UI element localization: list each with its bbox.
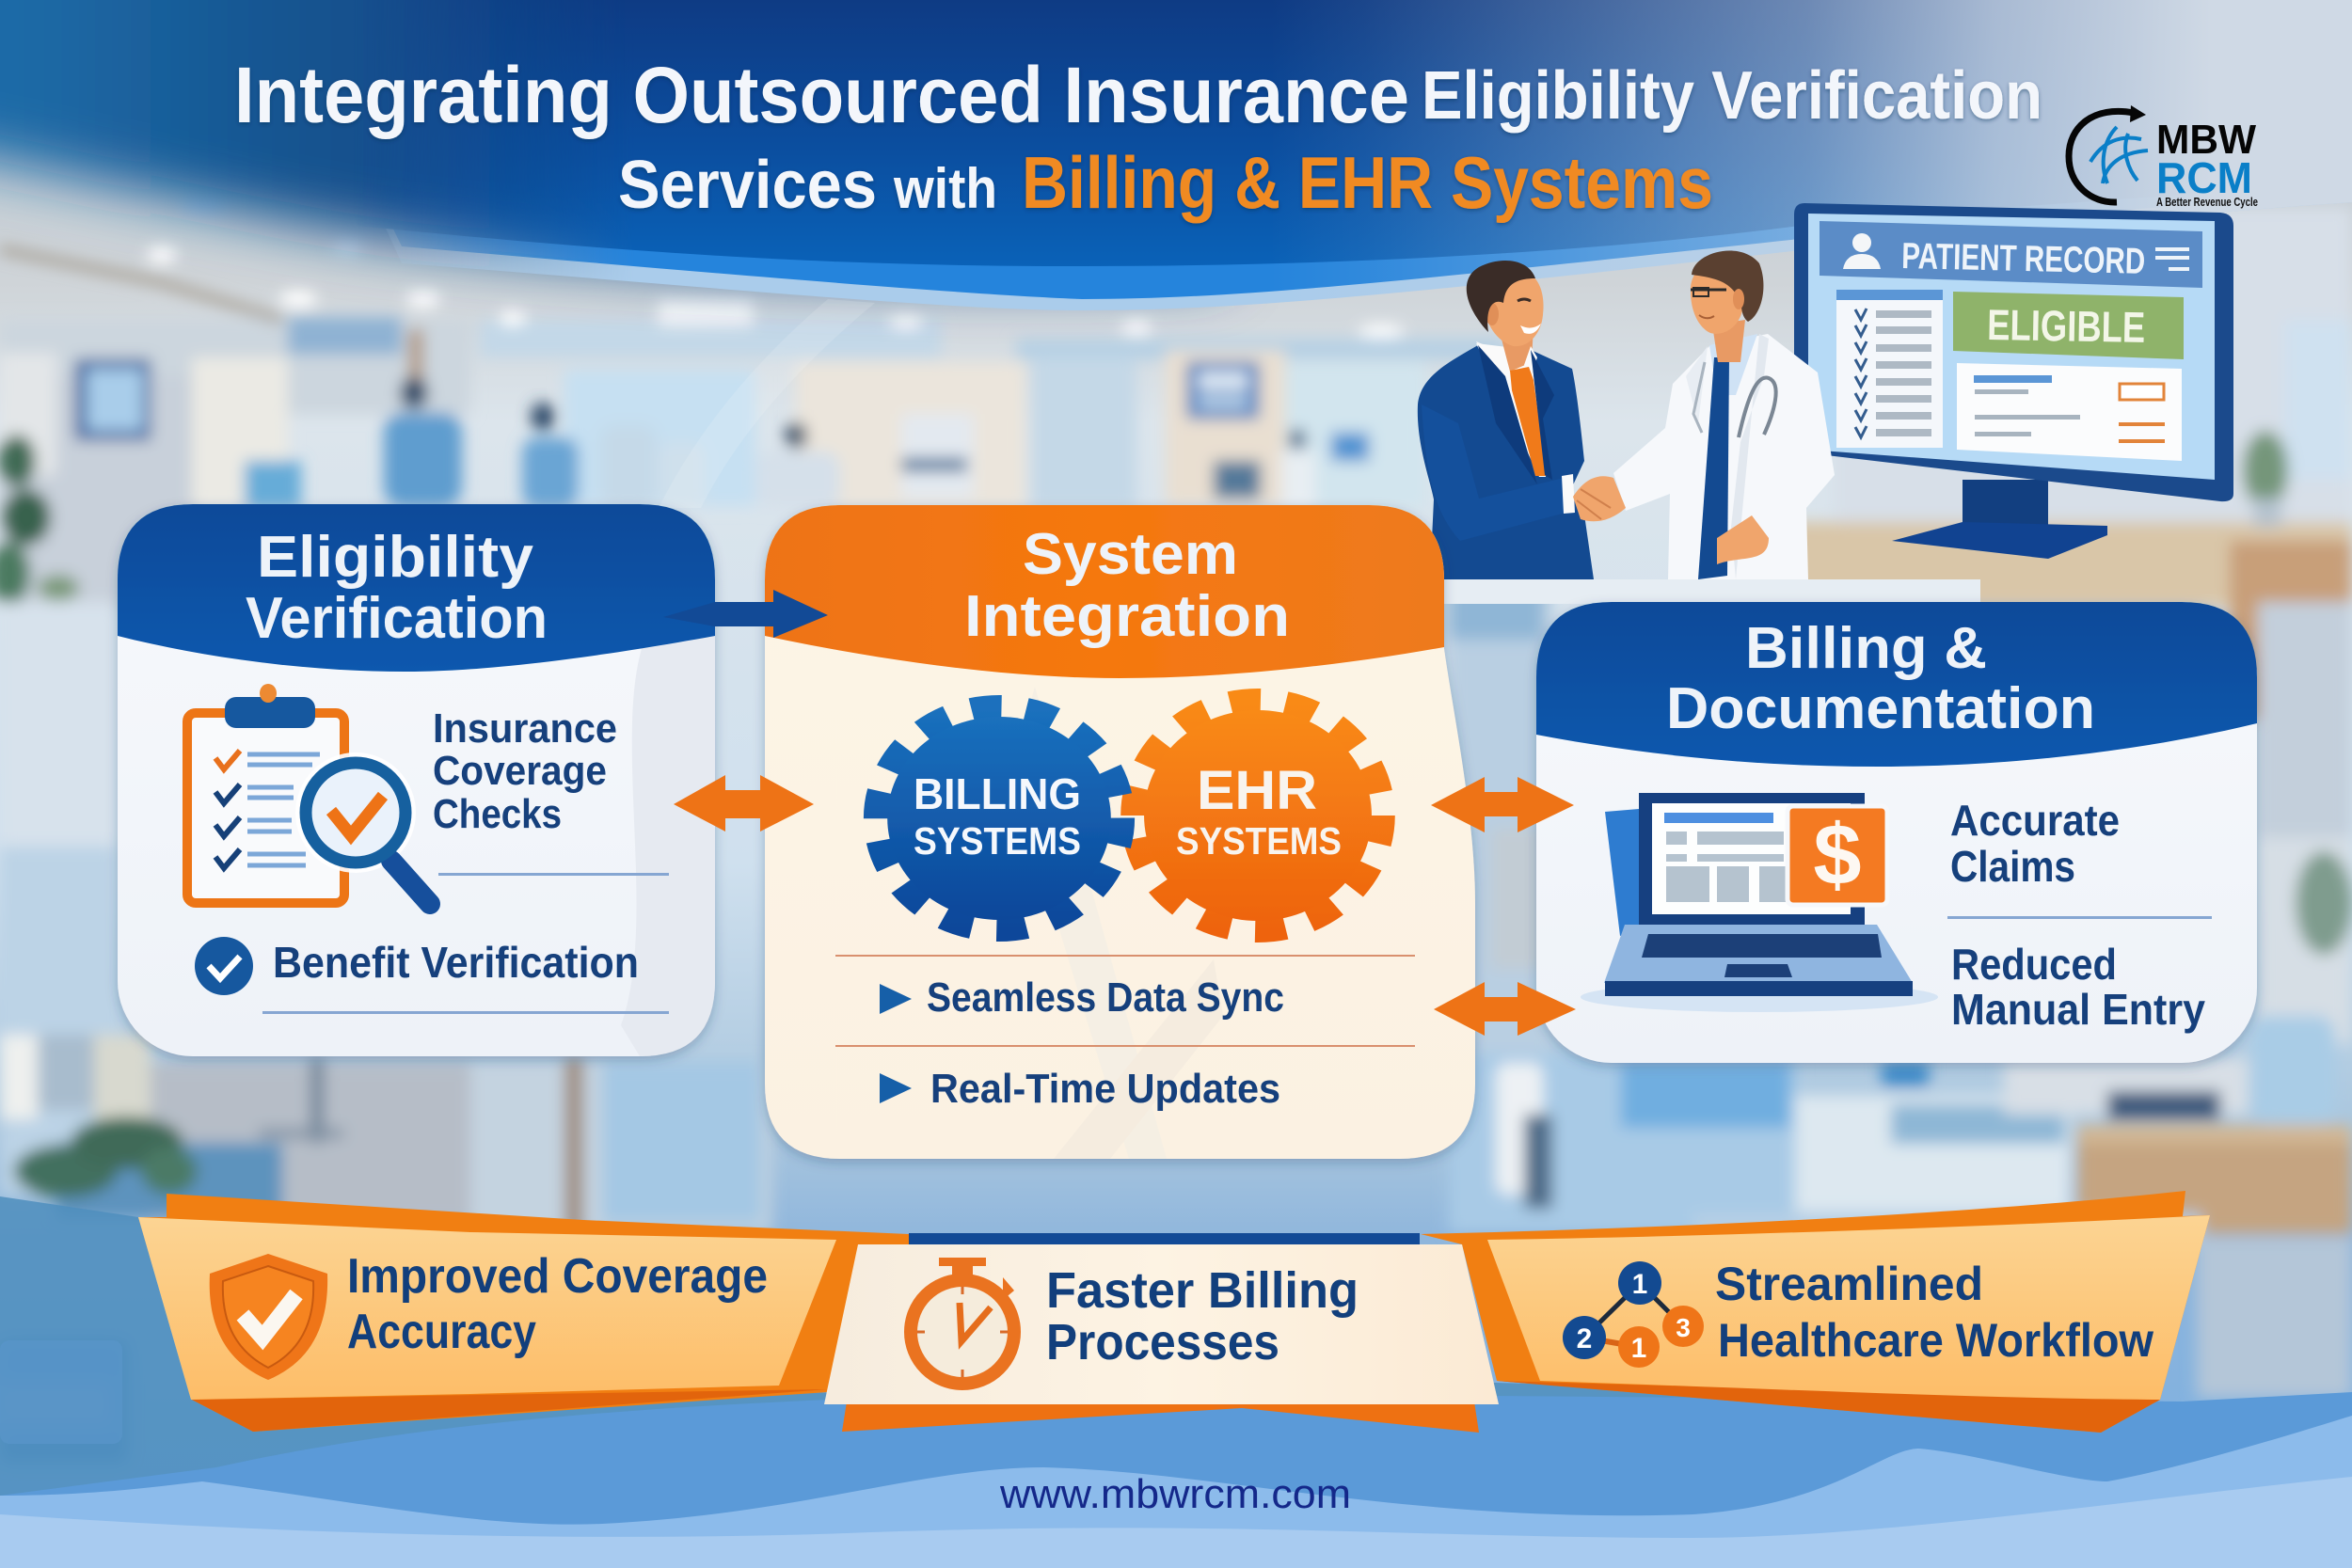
arrow: orange eligibility to integration xyxy=(674,775,814,832)
icon: laptop with dollar xyxy=(1581,793,1938,1012)
screen header: PATIENT RECORD xyxy=(1901,236,2146,282)
icon: stopwatch xyxy=(911,1258,1014,1384)
text: insurance coverage checks: Coverage xyxy=(433,748,607,794)
text: reduced manual entry xyxy=(1951,940,2205,1034)
gear labels: EHR xyxy=(1197,760,1317,821)
panel: eligibility verification xyxy=(118,504,715,1056)
card header: Documentation xyxy=(1666,676,2095,741)
card header: Eligibility xyxy=(257,525,534,590)
icon: numbered network: 3 xyxy=(1676,1313,1691,1342)
card header: System xyxy=(1023,522,1238,587)
arrow: orange integration to billing top xyxy=(1431,777,1574,832)
gear: ehr systems xyxy=(1136,703,1380,928)
lower right xyxy=(1449,1053,1797,1232)
panel: system integration xyxy=(765,505,1475,1159)
panel: billing and documentation xyxy=(1536,602,2257,1063)
screen header xyxy=(1820,221,2202,288)
banner: faster billing processes: Processes xyxy=(1046,1314,1279,1370)
handshake xyxy=(1573,476,1626,521)
text: insurance coverage checks xyxy=(433,705,617,837)
record details xyxy=(1957,363,2182,461)
banner: faster billing processes xyxy=(824,1233,1499,1433)
title: Billing & EHR Systems xyxy=(1022,141,1713,224)
checklist panel xyxy=(1836,290,1943,448)
title: with xyxy=(893,157,997,220)
logo: MBW RCM: A Better Revenue Cycle xyxy=(2156,195,2258,209)
text: insurance coverage checks: Insurance xyxy=(433,705,617,752)
icon: laptop with dollar: $ xyxy=(1813,807,1862,903)
card header xyxy=(1536,602,2257,767)
logo: MBW RCM: RCM xyxy=(2156,153,2252,202)
arrow: blue eligibility to integration xyxy=(663,590,828,638)
banner: improved coverage accuracy: Improved Coverage xyxy=(347,1249,768,1304)
arrow: orange integration to billing bottom xyxy=(1434,982,1576,1036)
text: reduced manual entry: Reduced xyxy=(1951,940,2117,989)
gear labels: SYSTEMS xyxy=(1176,819,1342,863)
header: navy title banner xyxy=(0,0,2352,508)
icon: numbered network xyxy=(1563,1261,1704,1368)
doctor figure xyxy=(1613,250,1835,579)
businessman figure xyxy=(1418,261,1594,579)
banner: faster billing processes: Faster Billing xyxy=(1046,1262,1359,1319)
website url: www.mbwrcm.com xyxy=(999,1471,1351,1517)
floor xyxy=(0,1196,2352,1568)
icon: clipboard with magnifier xyxy=(187,684,430,904)
icon: numbered network: 2 xyxy=(1577,1323,1592,1354)
logo: MBW RCM xyxy=(2069,105,2258,209)
title: Eligibility Verification xyxy=(1422,58,2042,134)
text: accurate claims xyxy=(1950,796,2120,891)
eligible badge xyxy=(1953,292,2184,359)
banner: improved coverage accuracy xyxy=(138,1194,950,1432)
text: accurate claims: Accurate xyxy=(1950,796,2120,845)
card header xyxy=(765,505,1444,678)
title: Services xyxy=(618,148,877,223)
banner: streamlined healthcare workflow xyxy=(1421,1191,2210,1433)
monitor stand xyxy=(1892,480,2107,559)
gear labels xyxy=(914,760,1342,863)
gear labels: BILLING xyxy=(914,769,1081,818)
card header: Billing & xyxy=(1745,616,1987,681)
banner: streamlined healthcare workflow: Healthcare Workflow xyxy=(1718,1314,2153,1367)
chair left xyxy=(0,1340,127,1463)
text: accurate claims: Claims xyxy=(1950,842,2075,891)
text: reduced manual entry: Manual Entry xyxy=(1951,985,2205,1034)
icon: numbered network: 1 xyxy=(1632,1269,1647,1300)
title xyxy=(234,51,2042,224)
banner: streamlined healthcare workflow: Streamlined xyxy=(1715,1258,1983,1310)
lower left xyxy=(0,602,118,884)
card header: Integration xyxy=(964,584,1290,649)
gear: billing systems xyxy=(879,709,1120,927)
title: Integrating Outsourced Insurance xyxy=(234,51,1409,139)
icon: numbered network: 1 xyxy=(1631,1333,1646,1364)
icon: check badge xyxy=(195,937,253,995)
logo: MBW RCM: MBW xyxy=(2156,117,2256,163)
card header xyxy=(118,504,715,672)
counter behind the figures xyxy=(1444,579,1980,604)
bullet: seamless data sync: Seamless Data Sync xyxy=(927,974,1284,1021)
monitor: patient record xyxy=(1794,203,2233,559)
far right wall, desk, monitor xyxy=(1835,207,2352,527)
banner: improved coverage accuracy: Accuracy xyxy=(347,1305,536,1359)
eligible badge: ELIGIBLE xyxy=(1987,300,2146,352)
text: insurance coverage checks: Checks xyxy=(433,791,562,837)
text: benefit verification: Benefit Verification xyxy=(273,938,639,987)
icon: shield xyxy=(210,1254,327,1380)
bullet: real-time updates: Real-Time Updates xyxy=(930,1066,1280,1112)
gear labels: SYSTEMS xyxy=(914,819,1081,863)
card header: Verification xyxy=(246,586,548,651)
